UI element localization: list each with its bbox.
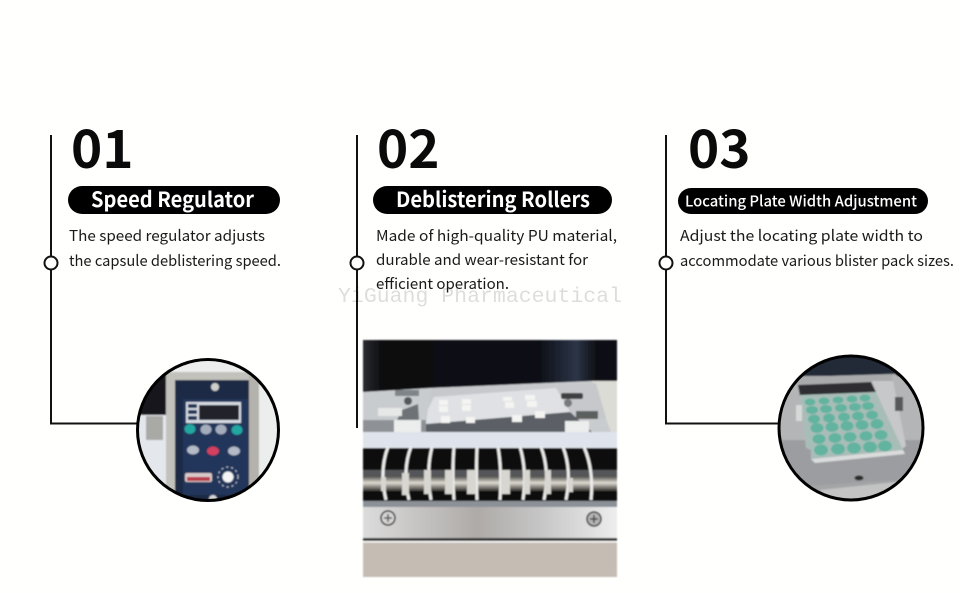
panel: 02 deblistering rollers [350,108,617,577]
connector line 01 [44,135,140,424]
number 01: 01 [71,108,134,184]
text block 01 [69,225,281,271]
icon: blister plate close-up [776,352,926,505]
text block 03 [680,225,954,271]
connector line 02 [350,135,364,428]
text block 03: accommodate various blister pack sizes. [680,250,954,271]
heading pill: Speed Regulator: Speed Regulator [91,184,255,214]
connector line 03 [660,135,780,424]
watermark: YiGuang Pharmaceutical [338,286,622,309]
text block 02: Made of high-quality PU material, [376,225,617,246]
text block 01: The speed regulator adjusts [69,225,265,246]
icon: control panel close-up [136,358,280,504]
number 02: 02 [377,108,440,184]
panel: 01 speed regulator [44,108,281,504]
text block 02: durable and wear-resistant for [376,249,588,270]
panel: 03 locating plate width adjustment [660,108,954,505]
photo: deblistering rollers [363,340,617,577]
text block 03: Adjust the locating plate width to [680,225,923,246]
heading pill: Locating Plate Width Adjustment: Locating Plate Width Adjustment [685,190,917,212]
text block 01: the capsule deblistering speed. [69,250,281,271]
heading pill: Deblistering Rollers: Deblistering Rollers [396,184,590,214]
number 03: 03 [688,108,751,184]
text block 02: efficient operation. [376,273,509,294]
text block 02 [376,225,617,294]
